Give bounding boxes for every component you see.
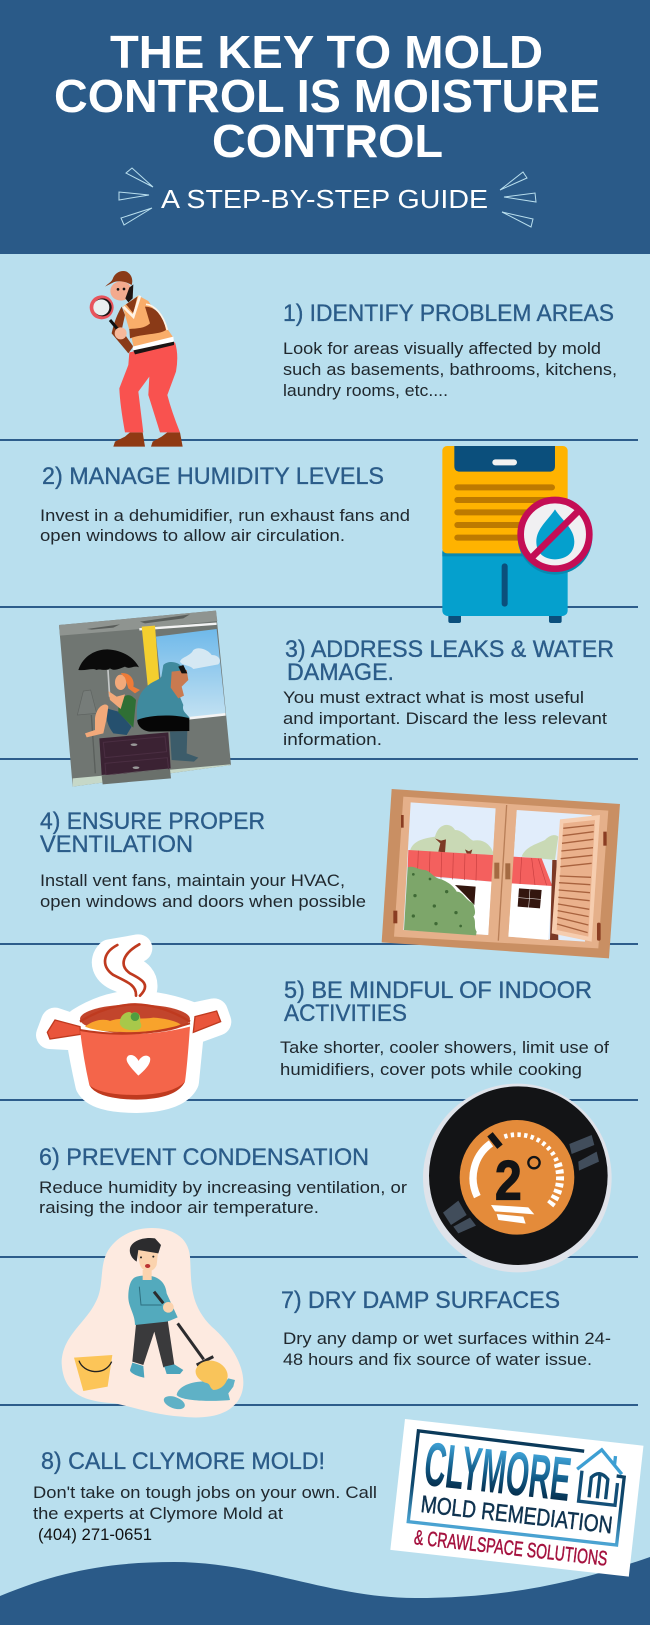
step 1 body: laundry rooms, etc.... xyxy=(283,382,448,400)
step 5 heading xyxy=(284,977,592,1027)
step 3 body: You must extract what is most useful xyxy=(283,689,584,707)
step 8 body xyxy=(33,1484,377,1544)
step 3 heading xyxy=(285,636,614,686)
icon: thermostat dial xyxy=(423,1084,612,1272)
pot white sticker outline xyxy=(50,948,217,1099)
step 4 text xyxy=(40,808,366,911)
title: CONTROL IS MOISTURE xyxy=(54,70,600,122)
step 7 heading: 7) DRY DAMP SURFACES xyxy=(281,1287,560,1314)
step 4 heading: 4) ENSURE PROPER xyxy=(40,808,265,835)
step 3 body: and important. Discard the less relevant xyxy=(283,710,607,728)
step 3 body: information. xyxy=(283,731,382,749)
step 4 body: Install vent fans, maintain your HVAC, xyxy=(40,872,345,890)
step 5 heading: 5) BE MINDFUL OF INDOOR xyxy=(284,977,592,1004)
step 5 body: Take shorter, cooler showers, limit use of xyxy=(280,1039,609,1057)
steam xyxy=(105,944,145,996)
icon: steaming pot sticker xyxy=(47,944,221,1100)
step 1 body xyxy=(283,340,617,400)
logo house icon xyxy=(574,1447,624,1506)
step 8 body: Don't take on tough jobs on your own. Call xyxy=(33,1484,377,1502)
step 4 body xyxy=(40,872,366,911)
step 8 heading: 8) CALL CLYMORE MOLD! xyxy=(41,1448,325,1475)
header band xyxy=(0,0,650,254)
step 7 body: Dry any damp or wet surfaces within 24- xyxy=(283,1330,611,1348)
step 8 body: the experts at Clymore Mold at xyxy=(33,1505,283,1523)
logo: Clymore Mold Remediation xyxy=(390,1419,643,1577)
icon: dehumidifier with no-water sign xyxy=(442,446,592,623)
step 6 body: Reduce humidity by increasing ventilation, or xyxy=(39,1179,408,1197)
step 4 heading: VENTILATION xyxy=(40,831,193,858)
step 6 text xyxy=(39,1144,408,1217)
step 8 text xyxy=(33,1448,377,1544)
illustration: open window xyxy=(382,789,620,958)
thermostat reading: 2 xyxy=(495,1148,522,1211)
icon: left sparks xyxy=(119,168,153,225)
subtitle: A STEP-BY-STEP GUIDE xyxy=(161,184,488,214)
step 7 body xyxy=(283,1330,611,1369)
step 7 body: 48 hours and fix source of water issue. xyxy=(283,1351,592,1369)
step 2 heading: 2) MANAGE HUMIDITY LEVELS xyxy=(42,463,384,490)
step 7 text xyxy=(281,1287,611,1369)
title xyxy=(54,26,600,167)
icon: right sparks xyxy=(500,172,536,227)
step 3 body xyxy=(283,689,607,749)
step 3 heading: DAMAGE. xyxy=(287,659,394,686)
step 1 body: such as basements, bathrooms, kitchens, xyxy=(283,361,617,379)
title: CONTROL xyxy=(212,115,443,167)
step 2 text xyxy=(40,463,410,545)
step 1 text xyxy=(283,300,617,400)
step 6 heading: 6) PREVENT CONDENSATION xyxy=(39,1144,369,1171)
step 5 body xyxy=(280,1039,609,1079)
step 2 body: Invest in a dehumidifier, run exhaust fans and xyxy=(40,507,410,525)
step 3 text xyxy=(283,636,614,749)
illustration: leaking ceiling photo xyxy=(59,611,231,787)
step 1 body: Look for areas visually affected by mold xyxy=(283,340,601,358)
step 5 body: humidifiers, cover pots while cooking xyxy=(280,1061,582,1079)
step 4 heading xyxy=(40,808,265,858)
step 6 body xyxy=(39,1179,408,1217)
step 4 body: open windows and doors when possible xyxy=(40,893,366,911)
step 8 body: (404) 271-0651 xyxy=(38,1526,152,1544)
bottom wave xyxy=(0,1557,650,1625)
step 3 heading: 3) ADDRESS LEAKS & WATER xyxy=(285,636,614,663)
icon: person mopping a spill xyxy=(62,1228,243,1417)
step 2 body xyxy=(40,507,410,545)
step 2 body: open windows to allow air circulation. xyxy=(40,527,345,545)
icon: inspector with magnifying glass xyxy=(90,271,183,447)
step 6 body: raising the indoor air temperature. xyxy=(39,1199,319,1217)
step 1 heading: 1) IDENTIFY PROBLEM AREAS xyxy=(283,300,614,327)
step 5 text xyxy=(280,977,609,1079)
step 5 heading: ACTIVITIES xyxy=(284,1000,407,1027)
title: THE KEY TO MOLD xyxy=(110,26,543,78)
